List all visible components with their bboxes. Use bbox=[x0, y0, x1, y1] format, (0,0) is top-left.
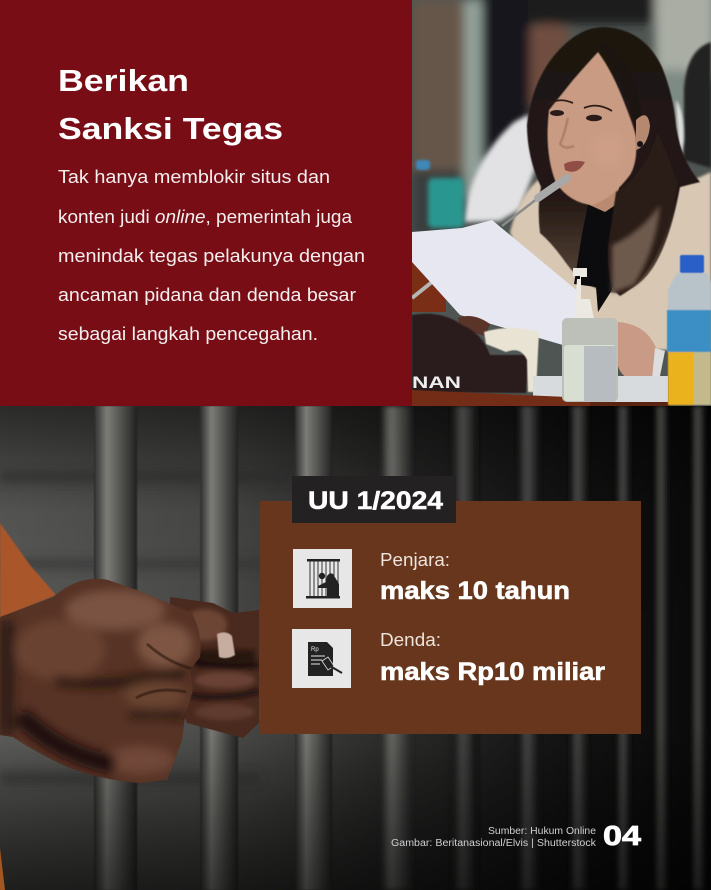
source credits: Sumber: Hukum Online bbox=[488, 826, 596, 837]
panel: legal penalties card bbox=[260, 476, 641, 734]
wall courses bbox=[0, 470, 254, 785]
microphone bbox=[412, 178, 567, 298]
desk dark items bbox=[412, 314, 528, 393]
front fist bbox=[0, 578, 200, 783]
label: law number bbox=[292, 476, 456, 523]
source credits bbox=[391, 826, 597, 849]
back person in white shirt bbox=[464, 114, 535, 222]
neck bbox=[586, 186, 619, 212]
source credits: Gambar: Beritanasional/Elvis | Shutterstock bbox=[391, 838, 597, 849]
teal chair bbox=[428, 178, 464, 228]
water bottle bbox=[667, 255, 711, 405]
text block: intro paragraph bbox=[58, 167, 365, 344]
sleeve bbox=[0, 523, 56, 618]
text: fine penalty bbox=[380, 630, 605, 686]
text block: intro paragraph: konten judi online, pemerintah juga bbox=[58, 207, 353, 227]
text block: intro paragraph: sebagai langkah pencegahan. bbox=[58, 324, 318, 344]
icon: document and gavel bbox=[292, 629, 351, 688]
title: Berikan bbox=[58, 63, 189, 98]
text block: intro paragraph: ancaman pidana dan denda besar bbox=[58, 285, 356, 305]
wooden desk back bbox=[412, 262, 446, 312]
title: Sanksi Tegas bbox=[58, 111, 283, 146]
cup bbox=[484, 328, 539, 392]
icon: document and gavel: Rp bbox=[311, 647, 319, 653]
paper bbox=[412, 220, 580, 348]
text block: intro paragraph: menindak tegas pelakunya dengan bbox=[58, 246, 365, 266]
title bbox=[58, 63, 283, 146]
rear hand bbox=[170, 597, 259, 738]
text: prison penalty: Penjara: bbox=[380, 550, 450, 570]
page number: 04 bbox=[603, 820, 642, 851]
label: law number: UU 1/2024 bbox=[308, 487, 443, 515]
photo: woman speaking at a microphone bbox=[412, 0, 711, 406]
text block: intro paragraph: Tak hanya memblokir situs dan bbox=[58, 167, 330, 187]
chair bbox=[684, 42, 711, 168]
panel: red text panel bbox=[0, 0, 412, 406]
blouse bbox=[574, 204, 614, 312]
hands bbox=[458, 316, 490, 336]
jacket bbox=[510, 172, 711, 350]
face bbox=[548, 52, 636, 205]
photo: hands gripping prison bars bbox=[0, 406, 711, 890]
nameplate letters: NAN bbox=[412, 373, 461, 392]
sanitizer bottle bbox=[562, 268, 618, 402]
hair back bbox=[527, 27, 700, 293]
text: prison penalty bbox=[380, 550, 570, 605]
table bbox=[533, 376, 668, 402]
text: fine penalty: Denda: bbox=[380, 630, 441, 650]
icon: prisoner behind bars bbox=[293, 549, 352, 608]
text: fine penalty: maks Rp10 miliar bbox=[380, 658, 605, 686]
bars bbox=[94, 406, 705, 890]
text: prison penalty: maks 10 tahun bbox=[380, 577, 570, 605]
hair tips front bbox=[608, 132, 678, 296]
